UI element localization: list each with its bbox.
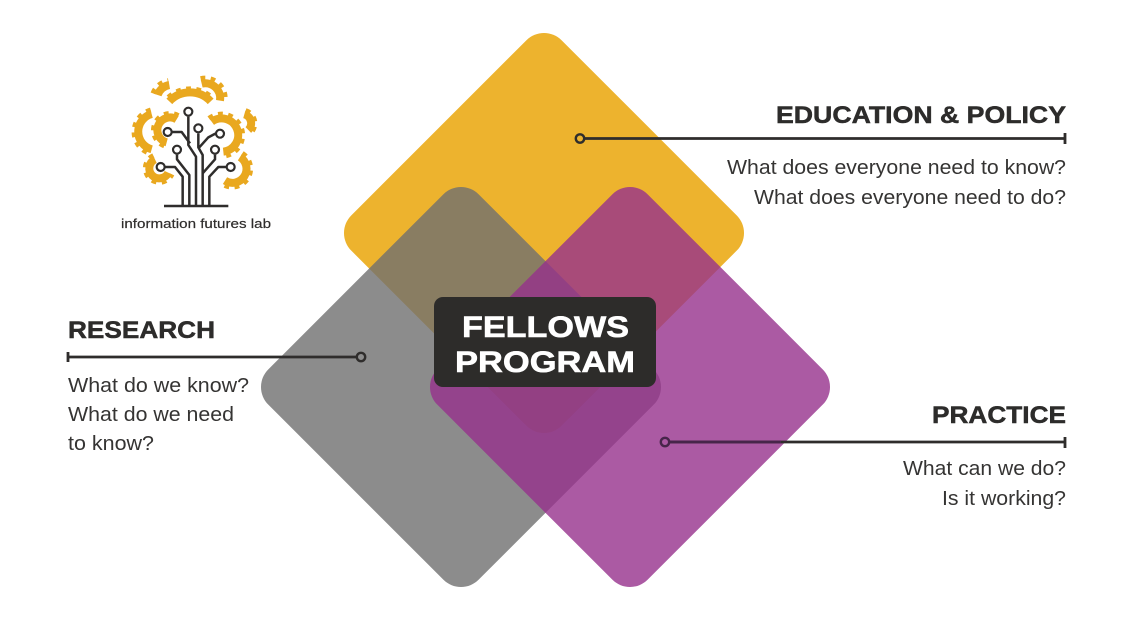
logo wordmark: information futures lab xyxy=(121,216,271,231)
label text: FELLOWS xyxy=(462,311,629,344)
text: research questions: What do we know? xyxy=(68,375,249,397)
callout: research xyxy=(68,317,365,455)
diamond: practice xyxy=(420,177,840,597)
heading: research: RESEARCH xyxy=(68,317,215,344)
callout: practice xyxy=(661,402,1066,510)
connector line xyxy=(669,437,1065,448)
label background xyxy=(434,297,656,387)
center label: fellows program xyxy=(434,297,656,387)
logo: information futures lab xyxy=(121,78,271,231)
text: practice questions: What can we do? xyxy=(903,458,1066,480)
label text: PROGRAM xyxy=(455,346,635,379)
callout: education and policy xyxy=(576,102,1066,209)
heading: practice: PRACTICE xyxy=(932,402,1066,429)
diamond: research xyxy=(251,177,671,597)
diamond: education and policy xyxy=(334,23,754,443)
connector line xyxy=(584,133,1065,144)
heading: education and policy: EDUCATION & POLICY xyxy=(776,102,1066,129)
text: education questions: What does everyone need to know? xyxy=(727,157,1066,179)
connector line xyxy=(68,352,357,362)
connector dot xyxy=(661,438,669,446)
text: research questions: What do we need xyxy=(68,404,234,426)
text: research questions: to know? xyxy=(68,433,154,455)
connector dot xyxy=(576,134,584,143)
text: practice questions: Is it working? xyxy=(942,488,1066,510)
connector dot xyxy=(357,353,365,361)
icon: gear tree xyxy=(134,78,255,206)
text: education questions: What does everyone need to do? xyxy=(754,187,1066,209)
connector line segment over purple diamond xyxy=(669,441,781,443)
